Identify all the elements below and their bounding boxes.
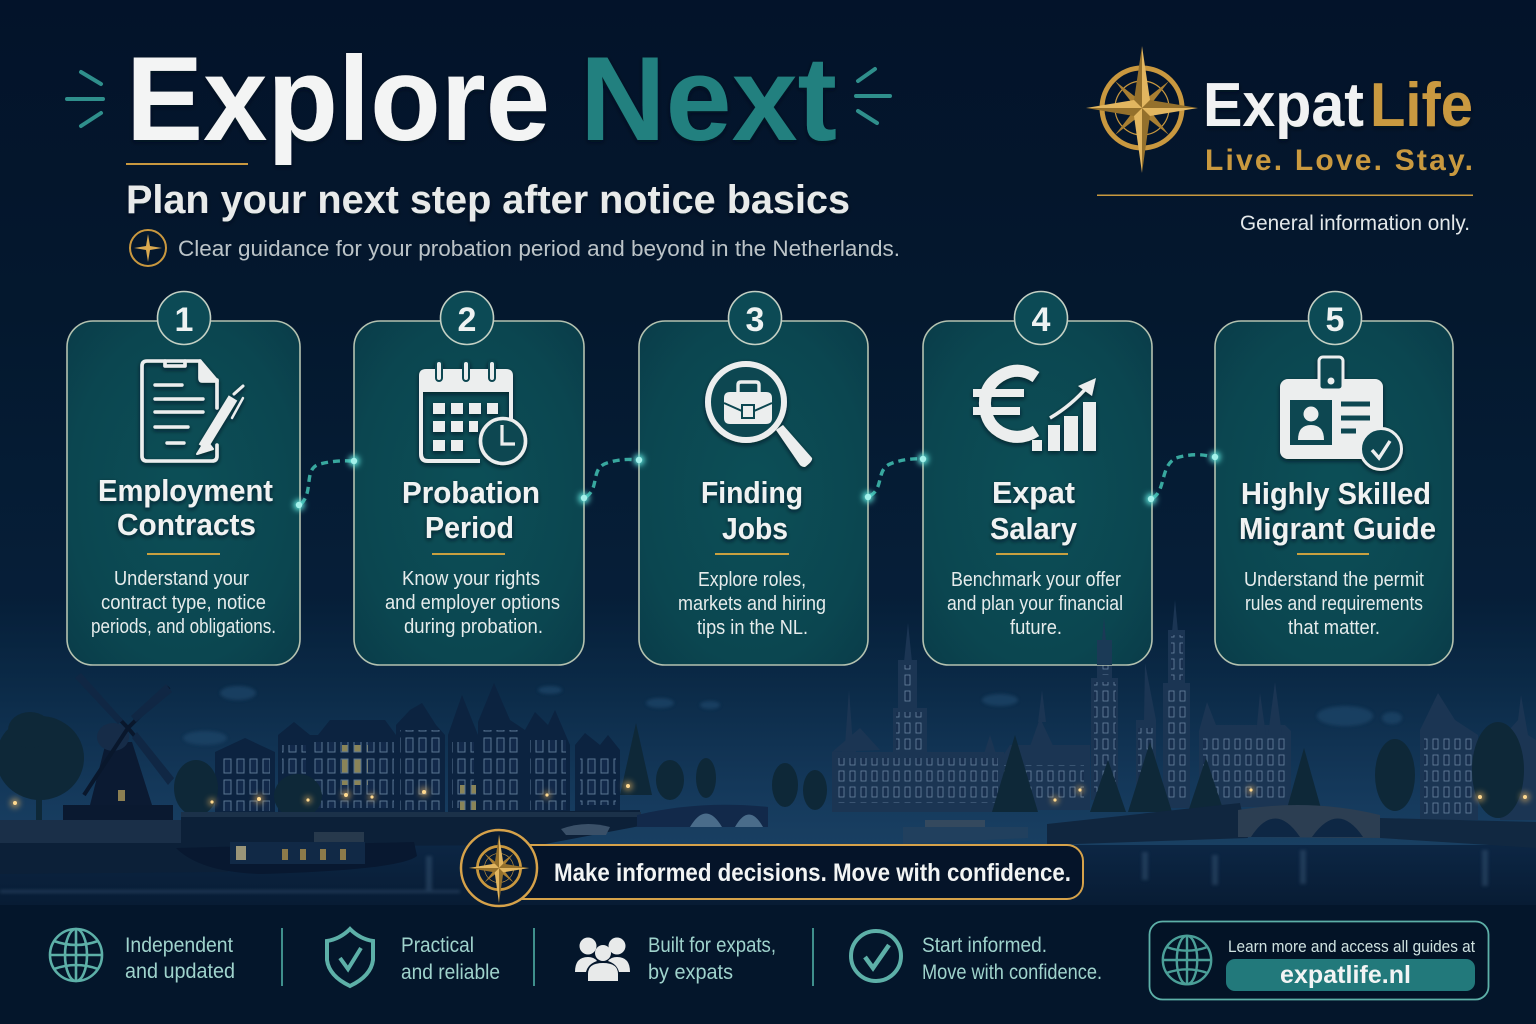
badge 4 bbox=[1014, 292, 1068, 344]
badge 5 bbox=[1308, 292, 1362, 344]
icon: magnifier with briefcase bbox=[708, 364, 812, 467]
heading: Period bbox=[425, 510, 514, 545]
panel: step 1 Employment Contracts bbox=[67, 292, 300, 665]
heading: Jobs bbox=[722, 511, 788, 546]
description: tips in the NL. bbox=[697, 617, 808, 639]
connector 2-3 bbox=[578, 454, 644, 504]
spire overlapping panel bbox=[1097, 617, 1112, 665]
heading bbox=[701, 475, 803, 546]
disclaimer: General information only. bbox=[1240, 212, 1470, 235]
website box bbox=[1150, 922, 1488, 1000]
logo slogan: Live. Love. Stay. bbox=[1205, 144, 1473, 177]
url pill bbox=[1226, 959, 1475, 991]
description bbox=[678, 569, 826, 639]
icon: people group bbox=[575, 938, 630, 981]
website box: Learn more and access all guides at bbox=[1228, 937, 1475, 956]
title: Explore Next: Next bbox=[580, 32, 837, 166]
panel: step 2 Probation Period bbox=[354, 292, 584, 665]
description: Know your rights bbox=[402, 568, 540, 590]
feature: Built for expats: Built for expats, bbox=[648, 934, 776, 957]
logo wordmark: Life bbox=[1370, 71, 1473, 140]
icon: shield check bbox=[327, 929, 373, 986]
url pill: expatlife.nl bbox=[1280, 961, 1411, 989]
panel: step 5 Highly Skilled Migrant Guide bbox=[1215, 292, 1453, 665]
logo wordmark: Expat bbox=[1203, 71, 1364, 140]
title: Explore Next: Explore bbox=[126, 32, 550, 166]
description bbox=[947, 569, 1123, 639]
feature: Start informed bbox=[851, 931, 1102, 984]
description: Understand the permit bbox=[1244, 569, 1424, 591]
logo wordmark bbox=[1203, 71, 1473, 140]
description bbox=[1244, 569, 1424, 639]
icon: compass medallion bbox=[461, 830, 537, 906]
heading: Employment bbox=[98, 473, 273, 508]
icon: ID badge with check bbox=[1280, 357, 1402, 470]
water reflections bbox=[0, 850, 1488, 893]
description: and employer options bbox=[385, 592, 560, 614]
heading: Highly Skilled bbox=[1241, 476, 1431, 511]
west skyline: canal house row bbox=[215, 683, 620, 817]
heading: Finding bbox=[701, 475, 803, 510]
gold rule bbox=[147, 553, 220, 555]
heading bbox=[402, 475, 540, 545]
feature: Start informed: Start informed. bbox=[922, 934, 1047, 957]
gold rule bbox=[432, 553, 505, 555]
description: Understand your bbox=[114, 568, 249, 590]
icon: globe bbox=[1163, 936, 1211, 984]
description: future. bbox=[1010, 617, 1062, 639]
description: Benchmark your offer bbox=[951, 569, 1121, 591]
quays bbox=[0, 803, 1536, 874]
feature: Practical and reliable: Practical bbox=[401, 934, 474, 957]
icon: calendar with clock bbox=[419, 364, 526, 464]
feature: Built for expats: by expats bbox=[648, 961, 733, 984]
badge 2: 2 bbox=[458, 301, 476, 339]
footer band bbox=[0, 905, 1536, 1024]
description: Explore roles, bbox=[698, 569, 806, 591]
description: and plan your financial bbox=[947, 593, 1123, 615]
street lamps bbox=[10, 781, 1530, 808]
canal boats bbox=[176, 820, 1028, 874]
icon: gold compass bbox=[1086, 46, 1198, 173]
heading bbox=[1239, 476, 1436, 546]
icon: euro with rising chart bbox=[973, 371, 1096, 451]
description: during probation. bbox=[404, 616, 543, 638]
description: periods, and obligations. bbox=[91, 616, 276, 638]
feature: Start informed: Move with confidence. bbox=[922, 961, 1102, 984]
gold rule bbox=[996, 553, 1068, 555]
connector 4-5 bbox=[1146, 452, 1220, 504]
heading: Probation bbox=[402, 475, 540, 510]
feature: Practical and reliable bbox=[327, 929, 500, 986]
description: contract type, notice bbox=[101, 592, 266, 614]
heading: Expat bbox=[992, 475, 1075, 510]
badge 1 bbox=[158, 292, 210, 344]
heading bbox=[98, 473, 273, 542]
feature: Built for expats bbox=[575, 934, 776, 984]
gold rule bbox=[715, 553, 789, 555]
badge 2 bbox=[440, 292, 494, 344]
panel: step 4 Expat Salary bbox=[923, 292, 1152, 665]
icon: globe bbox=[50, 929, 102, 981]
logo: ExpatLife bbox=[1086, 46, 1473, 235]
feature: Independent and updated: Independent bbox=[125, 934, 233, 957]
badge 5: 5 bbox=[1326, 301, 1344, 339]
callout: Make informed decisions bbox=[461, 830, 1083, 906]
canal water bbox=[0, 845, 1536, 905]
badge 1: 1 bbox=[175, 301, 193, 339]
feature: Practical and reliable: and reliable bbox=[401, 961, 500, 984]
feature: Independent and updated: and updated bbox=[125, 960, 235, 983]
trees bbox=[0, 712, 1524, 838]
callout text: Make informed decisions. Move with confidence. bbox=[554, 859, 1071, 887]
title: Explore Next bbox=[126, 32, 837, 166]
connector 3-4 bbox=[862, 454, 928, 502]
badge 3: 3 bbox=[746, 301, 764, 339]
heading: Contracts bbox=[117, 507, 256, 542]
description bbox=[385, 568, 560, 638]
arched bridges bbox=[637, 805, 1380, 838]
subtitle: Plan your next step after notice basics bbox=[126, 178, 850, 222]
logo rule bbox=[1097, 194, 1473, 196]
badge 4: 4 bbox=[1032, 301, 1051, 339]
icon: check circle bbox=[851, 931, 901, 981]
description: that matter. bbox=[1288, 617, 1380, 639]
gold rule bbox=[1297, 553, 1369, 555]
heading: Salary bbox=[990, 511, 1078, 546]
description bbox=[91, 568, 276, 638]
east skyline: towers and civic buildings bbox=[832, 600, 1536, 820]
tagline with compass bbox=[130, 230, 900, 266]
illustration: Amsterdam canal skyline at night bbox=[0, 600, 1536, 905]
icon: windmill bbox=[63, 673, 174, 839]
description: rules and requirements bbox=[1245, 593, 1423, 615]
heading bbox=[990, 475, 1078, 546]
connector 1-2 bbox=[294, 456, 360, 510]
icon: contract and pen bbox=[142, 361, 243, 461]
title gold rule bbox=[126, 163, 248, 165]
feature: Independent and updated bbox=[50, 929, 235, 983]
title accent rays bbox=[67, 69, 890, 126]
description: markets and hiring bbox=[678, 593, 826, 615]
badge 3 bbox=[728, 292, 782, 344]
panel: step 3 Finding Jobs bbox=[639, 292, 868, 665]
tagline with compass: Clear guidance for your probation period and beyond in the Netherlands. bbox=[178, 236, 900, 261]
heading: Migrant Guide bbox=[1239, 511, 1436, 546]
